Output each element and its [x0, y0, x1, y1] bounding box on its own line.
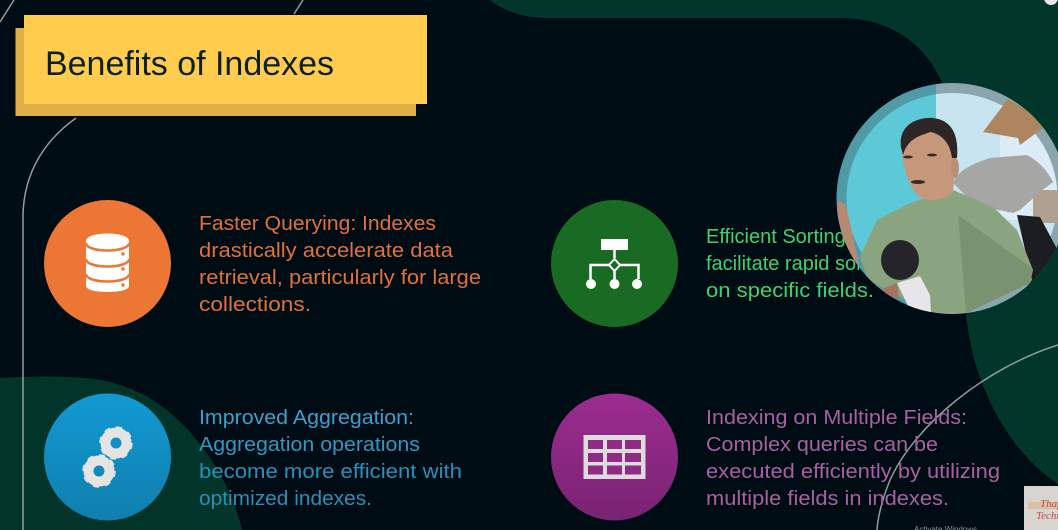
- icon: table: [551, 394, 678, 520]
- text: improved aggregation: optimized indexes.: [199, 488, 372, 510]
- grey plush: [953, 155, 1053, 213]
- wall: [846, 94, 936, 253]
- eyes and mouth: [903, 154, 937, 184]
- watermark logo: [1024, 486, 1058, 530]
- item: faster querying: [44, 200, 487, 327]
- text: improved aggregation: become more efficient with: [199, 461, 462, 483]
- text: improved aggregation: Improved Aggregation:: [199, 407, 414, 429]
- webcam circle: [836, 83, 1058, 320]
- hand on mic: [880, 283, 899, 298]
- text: indexing on multiple fields: executed efficiently by utilizing: [706, 461, 1000, 483]
- text: indexing on multiple fields: Complex queries can be: [706, 434, 938, 456]
- text: efficient sorting: on specific fields.: [706, 280, 874, 302]
- text: indexing on multiple fields: Indexing on Multiple Fields:: [706, 407, 967, 429]
- background shape: top right green: [490, 0, 1058, 484]
- title: Benefits of Indexes: [45, 45, 334, 83]
- text: faster querying: collections.: [199, 294, 311, 316]
- shirt: [860, 190, 1033, 313]
- text: faster querying: Faster Querying: Indexes: [199, 213, 436, 235]
- icon: hierarchy: [551, 200, 678, 327]
- chair: [1017, 215, 1056, 286]
- hair: [901, 118, 957, 158]
- background shape: bottom left green: [0, 376, 242, 530]
- text: improved aggregation: Aggregation operations: [199, 434, 420, 456]
- outer ring: [836, 83, 936, 315]
- icon: gears: [44, 394, 171, 520]
- face: [902, 127, 955, 200]
- microphone: [881, 240, 931, 313]
- item: efficient sorting: [551, 200, 932, 327]
- text: faster querying: drastically accelerate data: [199, 240, 454, 262]
- ear: [951, 158, 959, 178]
- top right corner marker: [1044, 0, 1058, 5]
- icon: database: [44, 200, 171, 327]
- text: efficient sorting: facilitate rapid sorting: [706, 253, 895, 275]
- shelf: [1033, 190, 1058, 223]
- item: indexing on multiple fields: [551, 394, 1006, 520]
- item: improved aggregation: [44, 394, 468, 520]
- hand: [836, 200, 860, 270]
- text: efficient sorting: Efficient Sorting: Indexes: [706, 226, 927, 248]
- text: indexing on multiple fields: multiple fields in indexes.: [706, 488, 949, 510]
- title banner: [16, 15, 427, 116]
- text: faster querying: retrieval, particularly for large: [199, 267, 481, 289]
- fan: [983, 99, 1044, 145]
